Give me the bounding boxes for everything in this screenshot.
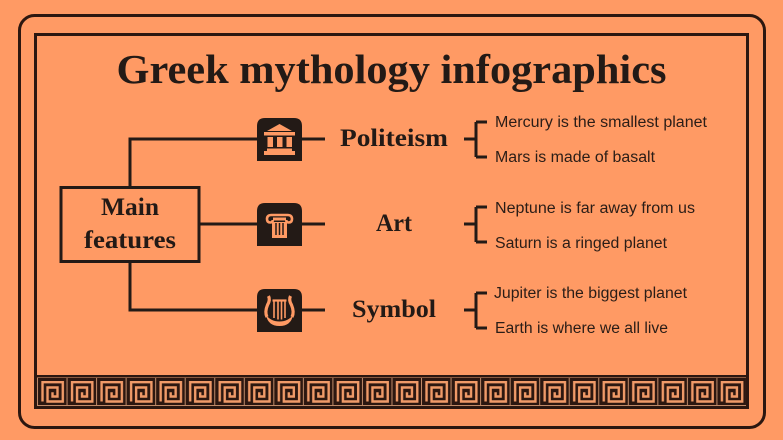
text: Neptune: Neptune is far away from us xyxy=(495,200,695,217)
icon: ionic column xyxy=(257,203,302,246)
box: main features: Main xyxy=(101,194,159,221)
heading: Art: Art xyxy=(376,208,412,237)
icon: temple xyxy=(257,118,302,161)
bracket xyxy=(464,122,487,157)
text: Earth: Earth is where we all live xyxy=(495,320,668,337)
title: Greek mythology infographics xyxy=(116,46,666,92)
text: Mars: Mars is made of basalt xyxy=(495,149,656,166)
branch: Politeism xyxy=(257,114,708,166)
meander band xyxy=(36,375,747,409)
heading: Politeism: Politeism xyxy=(340,123,448,152)
branch: Symbol xyxy=(257,285,688,337)
text: Saturn: Saturn is a ringed planet xyxy=(495,235,668,252)
icon: lyre xyxy=(257,289,302,332)
branch: Art xyxy=(257,200,695,252)
box: main features: features xyxy=(84,227,176,254)
bracket xyxy=(464,293,487,328)
connector lines from main box xyxy=(130,139,258,310)
text: Mercury: Mercury is the smallest planet xyxy=(495,114,708,131)
heading: Symbol: Symbol xyxy=(352,294,436,323)
text: Jupiter: Jupiter is the biggest planet xyxy=(494,285,688,302)
inner frame xyxy=(36,34,748,408)
bracket xyxy=(464,207,487,242)
box: main features xyxy=(61,188,199,262)
